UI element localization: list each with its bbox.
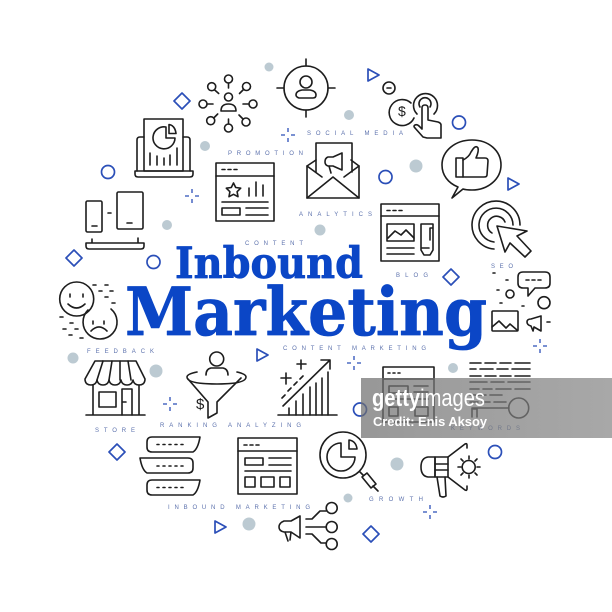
icon: megaphone network (279, 502, 337, 550)
icon: envelope megaphone (307, 143, 359, 198)
topic labels (87, 131, 520, 511)
icon: dollar click (383, 82, 441, 138)
icon: browser wireframe (238, 438, 297, 494)
icon: blog browser (381, 204, 439, 261)
watermark band: gettyimages (372, 385, 485, 412)
topic labels: CONTENT MARKETING (283, 346, 426, 352)
topic labels: BLOG (396, 273, 428, 279)
watermark band: Credit: Enis Aksoy (373, 415, 487, 429)
topic labels: RANKING ANALYZING (160, 423, 301, 429)
watermark band (361, 378, 612, 438)
icon: dollar click: $ (398, 103, 406, 119)
topic labels: FEEDBACK (87, 349, 154, 355)
icon: message list (140, 437, 200, 495)
icon: browser with star and chart (216, 163, 274, 221)
title: Marketing (125, 273, 487, 351)
icon: target person (277, 59, 335, 117)
topic labels: ANALYTICS (299, 212, 372, 218)
decorative shapes (66, 62, 547, 542)
icon: social content cluster (492, 272, 550, 331)
icon: keywords key (470, 363, 530, 418)
icon: magnifier pie chart (320, 432, 378, 491)
icon: megaphone with gear (421, 444, 480, 497)
topic labels: CONTENT (245, 241, 303, 247)
icon: thumbs up bubble (442, 140, 501, 198)
icon: happy and sad faces (60, 282, 117, 339)
topic labels: SEO (491, 264, 513, 270)
topic labels: INBOUND MARKETING (168, 505, 310, 511)
topic labels: KEYWORDS (451, 426, 520, 432)
icon: laptop report (135, 119, 193, 177)
topic labels: GROWTH (369, 497, 423, 503)
icon: funnel person (187, 352, 246, 418)
icon: target cursor (472, 201, 531, 257)
title (125, 239, 487, 351)
topic labels: PROMOTION (228, 151, 303, 157)
icon: devices (86, 192, 144, 249)
icon: funnel person: $ (196, 396, 205, 413)
icon: people network (199, 75, 257, 132)
icon: storefront (85, 361, 145, 415)
icon: growth chart (278, 360, 337, 415)
topic labels: SOCIAL MEDIA (307, 131, 403, 137)
title: Inbound (175, 239, 363, 289)
icon: browser layout (383, 367, 434, 422)
topic labels: STORE (95, 428, 135, 434)
